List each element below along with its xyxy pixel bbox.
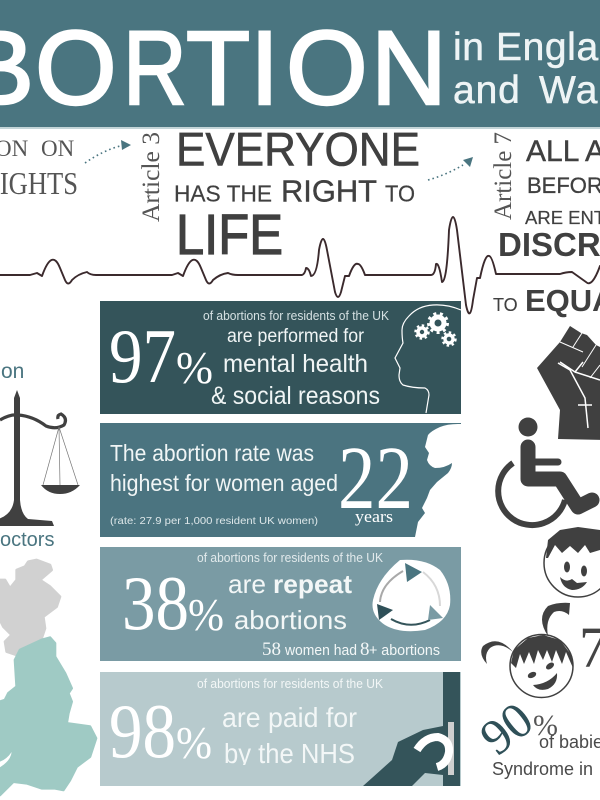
icon: cycle arrows — [372, 560, 450, 631]
england and wales — [0, 638, 96, 795]
panel text — [197, 551, 440, 660]
panel text: are paid for — [222, 702, 357, 733]
panel text: by the NHS — [224, 738, 355, 769]
article 3 statement: LIFE — [176, 203, 283, 267]
98 percent: % — [176, 717, 212, 768]
article 3 — [136, 122, 420, 267]
panel text: (rate: 27.9 per 1,000 resident UK women) — [110, 515, 318, 527]
panel text: 58 — [262, 639, 281, 660]
article 7 label: Article 7 — [488, 132, 517, 220]
title: TION — [186, 10, 447, 127]
scotland — [0, 560, 60, 655]
panel text: & social reasons — [211, 382, 380, 410]
panel text — [197, 677, 384, 769]
panel text: mental health — [223, 350, 368, 378]
icon: head with gears — [395, 305, 461, 413]
panel text: women had — [284, 642, 357, 659]
header banner — [0, 0, 600, 129]
article 7 statement — [493, 135, 600, 318]
article 3 statement — [174, 122, 420, 267]
left heading fragment: on — [1, 360, 24, 383]
38 percent: % — [188, 589, 224, 640]
article 3 statement: TO — [385, 180, 415, 206]
panel text — [203, 309, 390, 410]
panel text: abortions — [234, 605, 347, 635]
98 percent: 98 — [109, 688, 176, 774]
97 percent: % — [176, 342, 213, 393]
map: uk — [0, 560, 96, 795]
97 percent: 97 — [109, 313, 176, 399]
article 3 statement: RIGHT — [281, 174, 377, 208]
subtitle: and — [453, 69, 521, 112]
convention heading — [0, 136, 78, 202]
title — [0, 9, 447, 127]
heartbeat line — [0, 217, 600, 313]
panel text: of abortions for residents of the UK — [197, 551, 384, 565]
icon: girl face — [481, 603, 573, 698]
convention heading: ON — [41, 136, 75, 161]
subtitle — [453, 26, 600, 112]
icon: scales of justice — [0, 390, 80, 526]
panel: repeat — [100, 547, 461, 661]
panel text: of abortions for residents of the UK — [203, 309, 390, 323]
panel text: highest for women aged — [110, 470, 338, 496]
panel text — [110, 440, 338, 527]
panel text: are performed for — [227, 326, 365, 347]
38 percent: 38 — [122, 560, 189, 646]
90 percent note: % — [533, 709, 558, 742]
article 3 label: Article 3 — [136, 132, 165, 222]
panel text: of abortions for residents of the UK — [197, 677, 384, 691]
panel text: repeat — [273, 569, 352, 599]
article 3 statement: EVERYONE — [176, 122, 420, 176]
panel: mental health — [100, 301, 461, 414]
icon: hand inserting coin — [363, 672, 460, 786]
arrow: to article 7 — [428, 157, 473, 180]
panel text: + abortions — [369, 642, 440, 659]
panel: nhs — [100, 672, 461, 786]
22 years: years — [355, 507, 393, 526]
22 years: 22 — [338, 429, 413, 528]
arrow: to article 3 — [85, 140, 131, 163]
90 percent note: 90 — [469, 691, 543, 766]
panel text: 8 — [360, 639, 370, 660]
title: R — [123, 9, 187, 127]
90 percent note — [469, 691, 600, 779]
panel: age — [100, 423, 465, 537]
woman silhouette cut-out — [415, 424, 465, 537]
article 7 — [488, 132, 600, 318]
article 3 statement: HAS THE — [174, 180, 272, 206]
icon: wheelchair — [498, 418, 592, 525]
90 percent note: Syndrome in — [492, 759, 593, 779]
panel text: are — [228, 569, 266, 599]
icon: raised fist — [537, 326, 600, 440]
icon: boy face — [544, 527, 600, 597]
article 7 statement: TO — [493, 295, 518, 315]
panel text: The abortion rate was — [110, 440, 314, 466]
